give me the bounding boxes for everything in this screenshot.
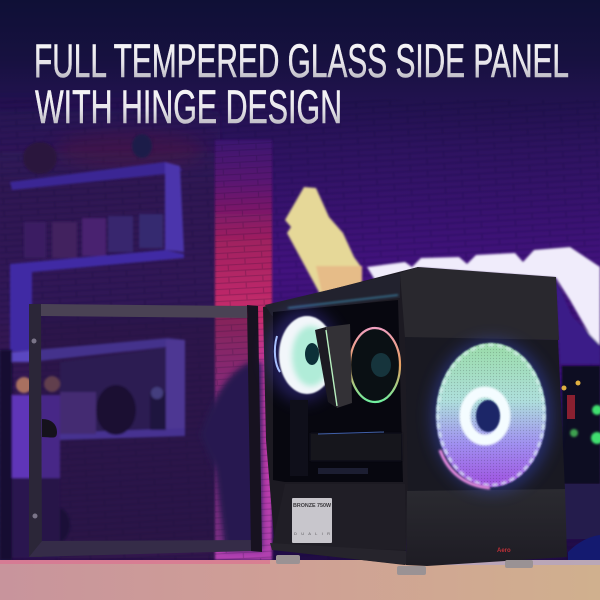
- rgb cpu cooler fan: [350, 328, 400, 402]
- case front top panel: [400, 267, 559, 340]
- wooden table top: [0, 560, 600, 600]
- aerocool logo: Aero: [497, 548, 511, 554]
- glowing pink pillar: [215, 140, 272, 560]
- power supply label: BRONZE 750W: [293, 503, 332, 509]
- rear rgb fan: [267, 309, 339, 401]
- power supply shroud: [272, 484, 406, 550]
- nanoleaf white light panels: [367, 247, 600, 364]
- door glass pane: [41, 316, 251, 541]
- chair silhouette behind door: [200, 362, 262, 550]
- open tempered glass door: [29, 304, 262, 557]
- door hinge side frame: [247, 305, 262, 552]
- upper wall shelf: [10, 134, 184, 352]
- door left frame: [29, 304, 42, 557]
- lower wall shelf and collectibles: [0, 338, 185, 560]
- computer case: [263, 267, 567, 575]
- case front lower panel: [406, 489, 567, 566]
- graphics card: [290, 400, 402, 476]
- power supply label: D U A L I R: [294, 531, 330, 536]
- front rgb fan: [432, 340, 552, 492]
- background shelf with green lights: [562, 366, 600, 562]
- interior window: [273, 300, 403, 482]
- case side frame: [263, 267, 420, 565]
- power supply label: [292, 498, 332, 543]
- case bottom rail: [270, 543, 408, 565]
- title heading: [34, 34, 569, 133]
- case front mesh panel: [405, 337, 565, 492]
- door top frame: [41, 304, 247, 318]
- door screws: [32, 338, 38, 518]
- nanoleaf cream light panels: [285, 187, 362, 294]
- door bottom frame: [29, 540, 251, 557]
- door handle: [42, 419, 57, 438]
- title line two: WITH HINGE DESIGN: [35, 80, 342, 133]
- cpu cooler tower: [315, 324, 352, 408]
- top mesh strip: [265, 273, 400, 316]
- case feet: [276, 555, 533, 575]
